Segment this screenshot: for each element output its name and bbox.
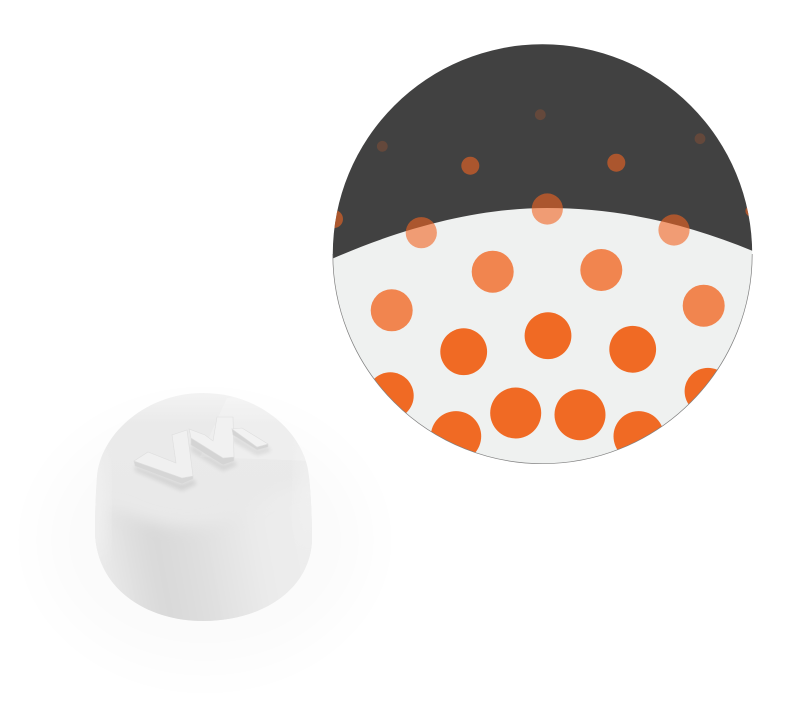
logo shadows xyxy=(135,435,271,491)
logo right stroke xyxy=(232,428,268,450)
cap embossed logo xyxy=(134,417,271,491)
magnified view circle xyxy=(325,35,760,468)
light background region xyxy=(334,208,752,464)
circle outline, lower arc xyxy=(333,254,752,464)
particles in light liquid: large solid dots xyxy=(374,312,717,452)
cap illustration xyxy=(95,393,312,621)
cap body xyxy=(95,393,312,621)
faint small particles xyxy=(377,109,705,152)
particles: medium dots xyxy=(371,249,725,331)
particles at surface and in dark region xyxy=(325,154,756,248)
dark upper region xyxy=(325,35,760,262)
cap soft ground shadow xyxy=(40,410,370,670)
logo left stroke xyxy=(134,430,193,484)
logo middle stroke xyxy=(189,417,234,465)
